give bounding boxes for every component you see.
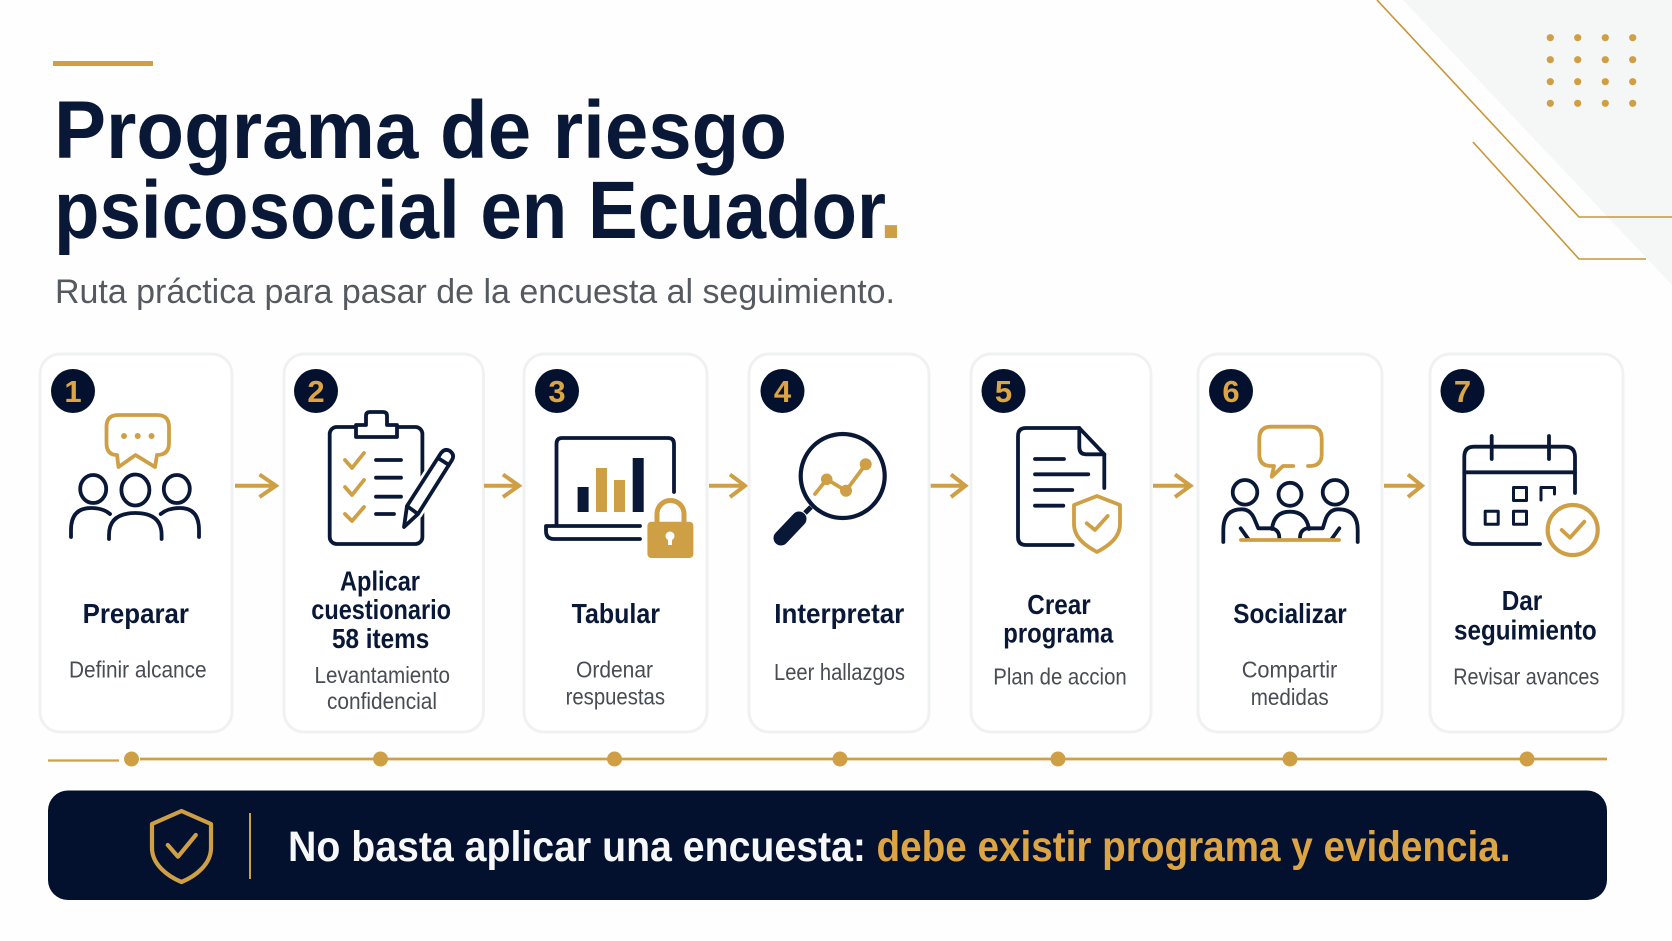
panel: step 7 Dar seguimiento: 7 [1454,374,1471,409]
icon: magnifier over line chart [781,434,885,538]
panel: step 4 Interpretar: Interpretar [774,598,905,629]
panel: step 3 Tabular [524,354,707,732]
icon: clipboard with pencil [330,412,453,544]
panel: step 6 Socializar [1198,354,1382,732]
arrow 2 [484,474,519,497]
panel: step 5 Crear programa: Plan de accion [993,663,1127,689]
timeline [48,752,1607,766]
arrow 1 [235,474,276,497]
panel: step 6 Socializar: 6 [1222,374,1240,409]
icon: team meeting with speech bubble [1223,427,1358,542]
panel: step 1 Preparar: 1 [64,374,82,409]
panel: step 5 Crear programa [971,354,1151,732]
panel: step 1 Preparar: Preparar [83,598,189,629]
panel: step 7 Dar seguimiento [1430,354,1623,732]
arrow 3 [709,474,745,497]
panel: step 1 Preparar: Definir alcance [69,657,207,683]
panel: step 2 Aplicar cuestionario: Levantamiento [314,662,450,688]
panel: step 2 Aplicar cuestionario: 58 items [332,623,429,654]
arrow 6 [1384,474,1422,497]
callout banner [48,790,1607,900]
panel: step 7 Dar seguimiento: Revisar avances [1453,663,1599,689]
subtitle: Ruta práctica para pasar de la encuesta al seguimiento. [55,273,895,311]
panel: step 2 Aplicar cuestionario: confidencial [327,688,437,714]
panel: step 4 Interpretar: 4 [774,374,792,409]
panel: step 2 Aplicar cuestionario: Aplicar [340,566,420,597]
panel: step 3 Tabular: Tabular [572,598,660,629]
arrow 5 [1153,474,1190,497]
panel: step 2 Aplicar cuestionario: 2 [307,374,325,409]
callout banner: No basta aplicar una encuesta: [288,823,866,871]
title: psicosocial en Ecuador [54,165,886,256]
panel: step 3 Tabular: respuestas [566,684,665,710]
panel: step 5 Crear programa: 5 [995,374,1012,409]
title [54,85,903,257]
icon: group with speech bubble [71,415,199,539]
panel: step 6 Socializar: Compartir [1242,657,1338,683]
panel: step 2 Aplicar cuestionario [284,354,484,732]
panel: step 4 Interpretar [749,354,929,732]
arrow 4 [931,474,966,497]
panel: step 1 Preparar [40,354,232,732]
callout banner: debe existir programa y evidencia. [876,823,1510,871]
panel: step 3 Tabular: Ordenar [576,657,653,683]
icon: shield with check [152,811,211,882]
icon: calendar with check [1464,436,1598,555]
panel: step 7 Dar seguimiento: seguimiento [1454,614,1597,645]
panel: step 7 Dar seguimiento: Dar [1502,585,1543,616]
decorative corner with gold lines and dots [1377,0,1672,285]
panel: step 5 Crear programa: Crear [1027,589,1091,620]
title: . [879,161,903,257]
panel: step 2 Aplicar cuestionario: cuestionario [311,594,451,625]
title: Programa de riesgo [54,85,787,176]
panel: step 5 Crear programa: programa [1003,618,1114,649]
icon: laptop with chart and lock [546,438,693,558]
panel: step 6 Socializar: medidas [1251,684,1329,710]
panel: step 3 Tabular: 3 [548,374,566,409]
panel: step 6 Socializar: Socializar [1233,598,1347,629]
panel: step 4 Interpretar: Leer hallazgos [774,659,905,685]
icon: document with shield [1018,428,1120,552]
accent bar [53,61,153,66]
